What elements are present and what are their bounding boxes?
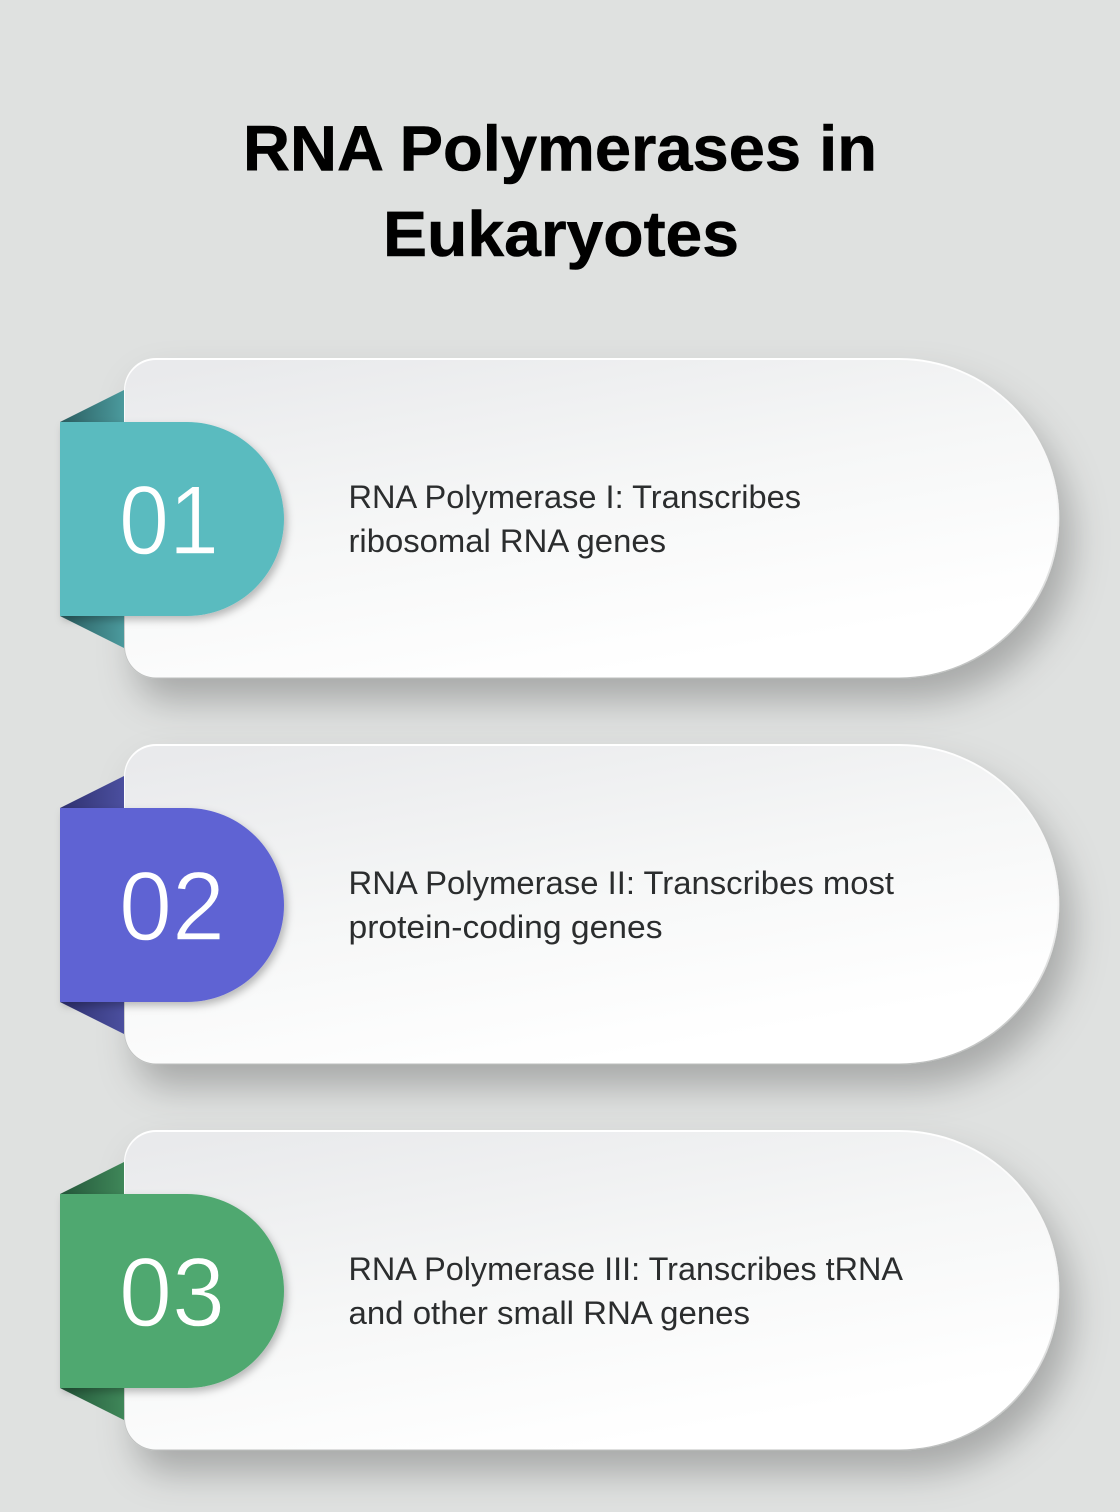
fold top 01: [60, 390, 124, 422]
fold top 03: [60, 1162, 124, 1194]
fold bottom 01: [60, 616, 124, 648]
description 02: protein-coding genes: [348, 909, 662, 945]
fold bottom 03: [60, 1388, 124, 1420]
title: [243, 112, 877, 270]
fold bottom 02: [60, 1002, 124, 1034]
card 02: [124, 744, 1059, 1064]
description 03: [348, 1251, 904, 1331]
card 03: [124, 1130, 1059, 1450]
description 03: and other small RNA genes: [348, 1295, 750, 1331]
title: Eukaryotes: [383, 198, 739, 270]
description 01: RNA Polymerase I: Transcribes: [348, 479, 801, 515]
number tab 03: [60, 1194, 284, 1388]
card 02 face: [125, 746, 1058, 1064]
description 01: ribosomal RNA genes: [348, 523, 666, 559]
card 01 face: [125, 360, 1058, 678]
fold top 02: [60, 776, 124, 808]
number 02: 02: [119, 851, 225, 961]
title: RNA Polymerases in: [243, 112, 877, 184]
description 02: [348, 865, 894, 945]
number tab 01: [60, 422, 284, 616]
panel: step 01: [60, 358, 1059, 678]
description 03: RNA Polymerase III: Transcribes tRNA: [348, 1251, 904, 1287]
description 02: RNA Polymerase II: Transcribes most: [348, 865, 894, 901]
card 03 face: [125, 1132, 1058, 1450]
panel: step 03: [60, 1130, 1059, 1450]
number tab 02: [60, 808, 284, 1002]
panel: step 02: [60, 744, 1059, 1064]
number 03: 03: [119, 1237, 225, 1347]
description 01: [348, 479, 801, 559]
card 01: [124, 358, 1059, 678]
number 01: 01: [119, 465, 219, 575]
